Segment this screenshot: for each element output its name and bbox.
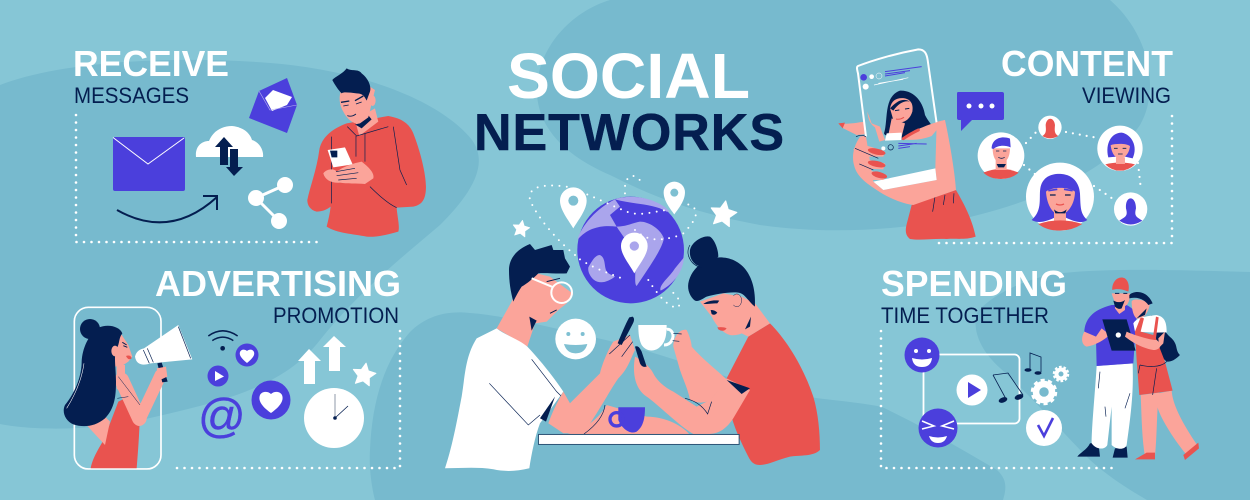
icon: at sign: @: [198, 389, 246, 442]
avatars: [978, 116, 1147, 231]
avatar: large woman: [1026, 163, 1094, 231]
heading: content viewing: CONTENT: [1001, 43, 1173, 84]
heading: spending time together: [881, 263, 1067, 328]
heading: advertising promotion: ADVERTISING: [155, 263, 401, 304]
heading: content viewing: [1001, 43, 1173, 108]
icon: map pin left: [560, 187, 587, 228]
panel: content viewing: [838, 43, 1173, 243]
avatar: small red: [1038, 116, 1062, 139]
icon: smiley: [555, 319, 596, 359]
chart: globe: [577, 197, 684, 303]
icon: envelope: [113, 137, 185, 191]
heading: receive messages: [73, 43, 229, 108]
title: SOCIAL: [507, 40, 750, 112]
avatar: blue silhouette: [1114, 192, 1147, 226]
panel: central illustration: [445, 176, 820, 471]
icon: map pin centre: [621, 233, 648, 273]
panel: advertising promotion: [64, 263, 401, 469]
icon: large heart badge: [252, 380, 290, 420]
network dotted links: [1024, 130, 1141, 201]
heading: receive messages: MESSAGES: [74, 83, 189, 108]
icon: music notes: [993, 353, 1042, 404]
icon: map pin right: [664, 182, 685, 214]
icon: cloud sync: [196, 126, 263, 176]
avatar: man: [978, 132, 1024, 179]
icon: share: [248, 178, 292, 228]
title: [474, 40, 784, 162]
person: couple: [1077, 277, 1199, 460]
person: woman with megaphone in phone: [64, 307, 192, 469]
dotted trails: [530, 176, 696, 307]
icon: play badge: [208, 366, 228, 386]
heading: content viewing: VIEWING: [1082, 83, 1171, 108]
icon: clock: [304, 388, 364, 448]
icon: laughing emoji: [918, 408, 958, 448]
heading: receive messages: RECEIVE: [73, 43, 229, 84]
icon: star: [353, 363, 376, 386]
table: [538, 434, 739, 444]
icon: large gear: [1032, 380, 1056, 404]
avatar: woman: [1097, 126, 1143, 171]
icon: small heart badge: [236, 344, 258, 366]
icon: star left: [513, 220, 530, 237]
icon: smiling emoji: [904, 338, 940, 372]
heading: spending time together: SPENDING: [881, 263, 1067, 304]
arrows up: [298, 336, 346, 384]
heading: spending time together: TIME TOGETHER: [881, 303, 1049, 328]
arrow: curved: [117, 196, 217, 222]
heading: advertising promotion: PROMOTION: [273, 303, 399, 328]
icon: wifi: [208, 331, 238, 351]
icon: star right: [711, 201, 737, 227]
panel: spending time together: [881, 263, 1199, 468]
icon: coffee cup: [610, 407, 645, 433]
person: man with phone: [445, 244, 635, 471]
heading: advertising promotion: [155, 263, 401, 328]
icon: speech bubble: [957, 92, 1004, 131]
panel: receive messages: [73, 43, 426, 242]
icon: play button: [956, 374, 988, 406]
icon: check mark: [1026, 410, 1062, 446]
video frame: [924, 354, 1020, 424]
icon: open envelope: [249, 78, 297, 133]
person: man with phone: [307, 68, 426, 237]
person: hand holding phone: [838, 49, 976, 240]
icon: small gear: [1054, 367, 1068, 381]
person: woman with phone: [563, 236, 820, 465]
title: NETWORKS: [474, 104, 784, 162]
